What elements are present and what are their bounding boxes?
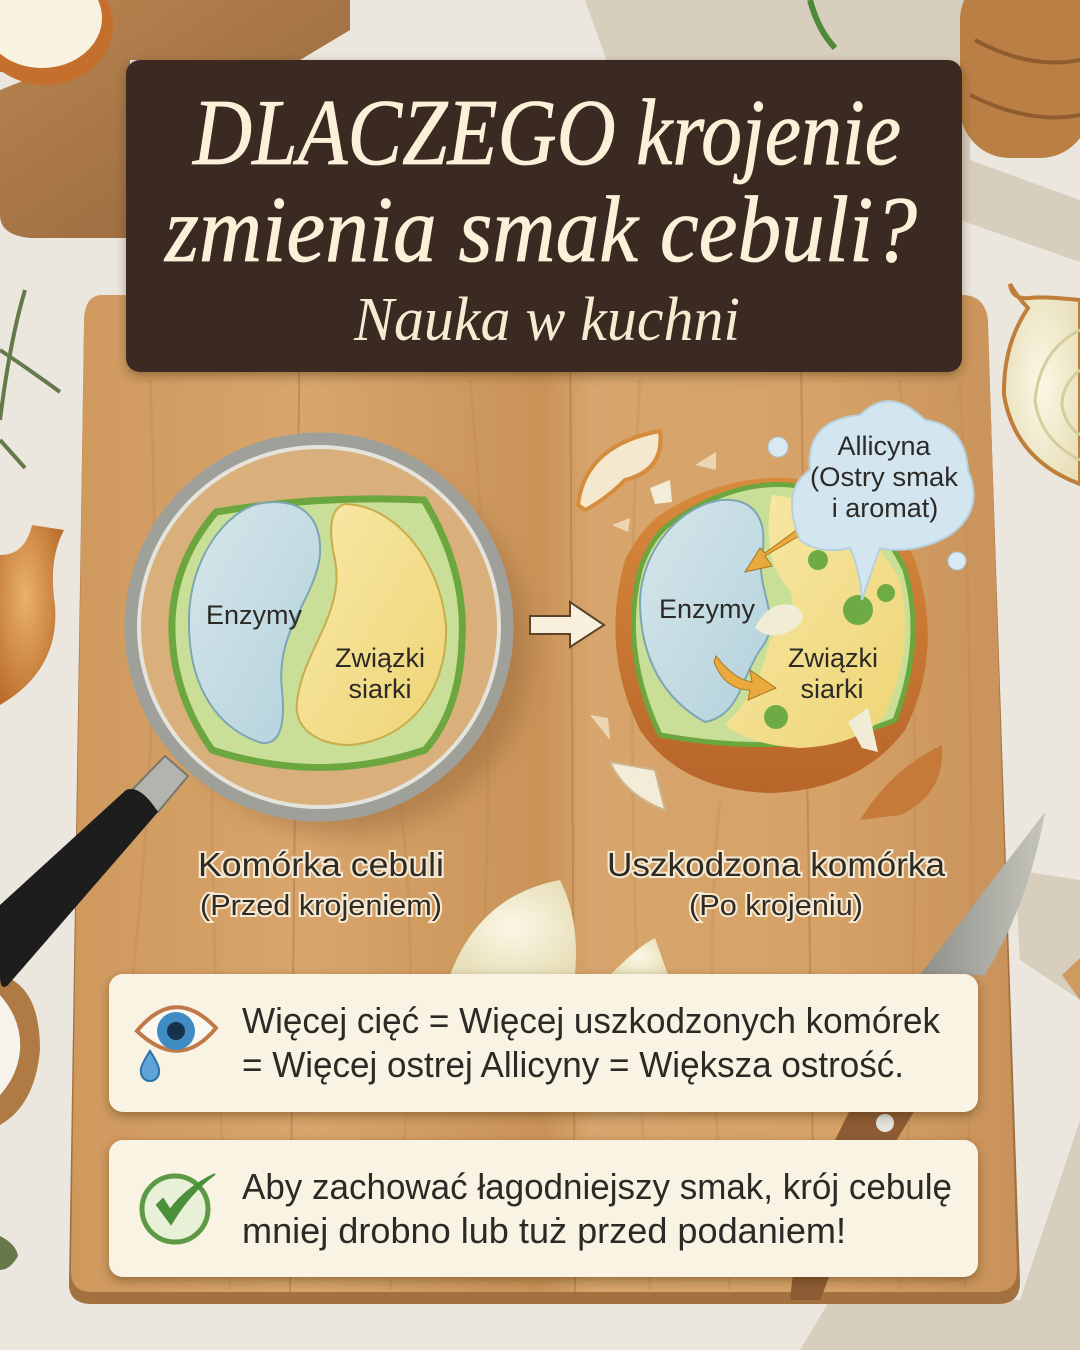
arrow: lower xyxy=(714,656,776,700)
sulfur region xyxy=(725,495,905,748)
text line 2: = Więcej ostrej Allicyny = Większa ostrość. xyxy=(242,1044,904,1085)
icon: teary eye xyxy=(137,1007,216,1081)
caption: after: (Po krojeniu) xyxy=(689,890,863,922)
vacuole: sulfur compounds xyxy=(297,504,446,745)
caption: after: Uszkodzona komórka xyxy=(607,846,946,883)
title: DLACZEGO krojenie xyxy=(191,81,901,185)
outer skin xyxy=(615,478,928,793)
arrow xyxy=(530,602,604,647)
onion peel fragments xyxy=(578,431,942,820)
enzyme vacuole xyxy=(640,500,770,722)
inner wall xyxy=(633,484,913,745)
arrow: upper xyxy=(745,526,806,572)
label: enzymes: Enzymy xyxy=(659,594,755,624)
title line 2: zmienia smak cebuli? xyxy=(163,178,917,282)
cutting board xyxy=(69,295,1020,1304)
caption: before: Komórka cebuli xyxy=(198,846,444,883)
info box: more cuts xyxy=(109,974,978,1112)
label: sulfur compounds: Związki xyxy=(788,643,878,673)
caption: after xyxy=(607,846,946,922)
label: enzymes: Enzymy xyxy=(206,600,302,630)
label: sulfur compounds: Związki xyxy=(335,643,425,673)
subtitle: Nauka w kuchni xyxy=(353,286,740,354)
caption: before xyxy=(198,846,444,922)
torn edge xyxy=(755,604,878,752)
label: sulfur compounds line 2: siarki xyxy=(800,674,864,704)
text line 1: Aby zachować łagodniejszy smak, krój cebulę xyxy=(242,1166,952,1207)
bubble text line 3: i aromat) xyxy=(832,493,938,523)
handle xyxy=(0,756,188,987)
vacuole: enzymes xyxy=(189,502,320,743)
text line 1: Więcej cięć = Więcej uszkodzonych komórek xyxy=(242,1000,941,1041)
title panel xyxy=(126,60,962,372)
label: sulfur compounds line 2: siarki xyxy=(348,674,412,704)
onion pieces and knife on the board xyxy=(450,812,1045,1300)
speech bubble: allicin xyxy=(768,401,974,600)
icon: green check xyxy=(142,1174,215,1242)
lens xyxy=(131,439,507,815)
text line 2: mniej drobno lub tuż przed podaniem! xyxy=(242,1210,846,1251)
damaged cell xyxy=(615,478,928,793)
caption: before: (Przed krojeniem) xyxy=(200,890,442,922)
glass shadow xyxy=(160,465,530,835)
intact cell wall xyxy=(172,499,462,768)
bubble text: Allicyna xyxy=(837,431,931,461)
info box: tip xyxy=(109,1140,978,1277)
bubble text line 2: (Ostry smak xyxy=(810,462,959,492)
magnifying glass with intact cell xyxy=(0,439,530,987)
allicin dots xyxy=(764,550,895,729)
